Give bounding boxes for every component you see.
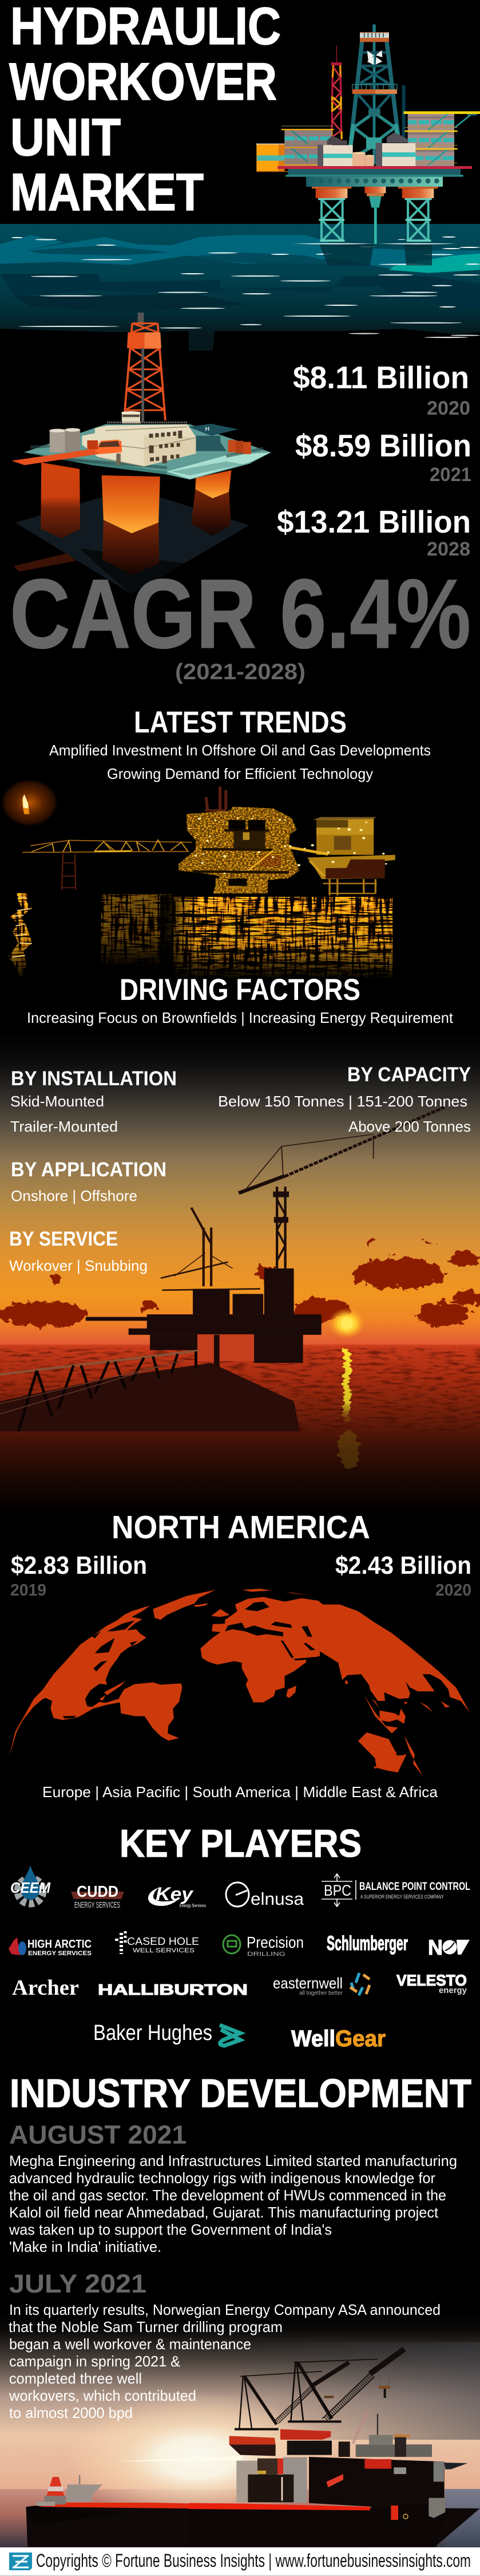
north america landmass bbox=[9, 1605, 150, 1756]
segment: by service: Workover | Snubbing bbox=[9, 1257, 148, 1274]
development: July 2021: began a well workover & maintenance bbox=[9, 2335, 251, 2353]
tanks and barrels bbox=[49, 428, 251, 454]
world globe map bbox=[9, 1589, 470, 1775]
logo: WellGear: Well bbox=[291, 2026, 335, 2051]
crane hook bbox=[324, 2386, 390, 2398]
australia bbox=[358, 1732, 406, 1773]
logo: CUDD: CUDD bbox=[77, 1882, 118, 1900]
development: July 2021: workovers, which contributed bbox=[9, 2387, 196, 2404]
logo: WellGear: Gear bbox=[335, 2026, 386, 2051]
helipad: H bbox=[205, 427, 209, 432]
photo: crane vessel at sunset bbox=[0, 2314, 480, 2547]
photo: offshore platform at night bbox=[0, 778, 395, 979]
sun flare bbox=[66, 2392, 329, 2524]
small crane bbox=[161, 1208, 260, 1290]
cuba and caribbean bbox=[100, 1681, 125, 1701]
background crane and superstructure bbox=[339, 2410, 432, 2457]
big crane bbox=[239, 1108, 444, 1269]
development: July 2021: to almost 2000 bpd bbox=[9, 2404, 133, 2421]
platform lights bbox=[188, 817, 387, 874]
title: WORKOVER bbox=[9, 53, 277, 111]
segment: by installation: Trailer-Mounted bbox=[10, 1118, 118, 1135]
title bbox=[9, 0, 281, 222]
segment: by installation: BY INSTALLATION bbox=[11, 1068, 177, 1090]
footer bbox=[0, 2547, 480, 2576]
driving factors: DRIVING FACTORS bbox=[120, 973, 360, 1007]
logo: Balance Point Control: A SUPERIOR ENERGY SERVICES COMPANY bbox=[360, 1894, 444, 1900]
development: August 2021: the oil and gas sector. The development of HWUs commenced in the bbox=[9, 2187, 446, 2204]
market value 2028 bbox=[277, 504, 471, 560]
title: MARKET bbox=[10, 163, 204, 222]
logo: Precision Drilling: Precision bbox=[247, 1933, 304, 1951]
logo: Cased Hole: CASED HOLE bbox=[127, 1936, 199, 1947]
crane vessel at right bbox=[189, 2349, 467, 2547]
logo: WellGear bbox=[291, 2026, 386, 2051]
development: July 2021: In its quarterly results, Norwegian Energy Company ASA announced bbox=[9, 2301, 441, 2318]
deck bbox=[24, 424, 271, 480]
flare bbox=[0, 778, 59, 827]
uk bbox=[211, 1609, 229, 1617]
market value 2028: $13.21 Billion bbox=[277, 504, 471, 539]
driving factors bbox=[27, 973, 454, 1026]
logo: easternwell: all together better bbox=[299, 1990, 343, 1996]
development: July 2021: that the Noble Sam Turner drilling program bbox=[9, 2318, 283, 2335]
crane houses bbox=[229, 2421, 342, 2456]
logo: High Arctic: HIGH ARCTIC bbox=[27, 1938, 92, 1951]
logo: NOV: N bbox=[428, 1936, 443, 1959]
logo: Halliburton: HALLIBURTON bbox=[98, 1981, 248, 1998]
south america bbox=[118, 1683, 182, 1740]
segment: by application: Onshore | Offshore bbox=[11, 1187, 137, 1204]
sun bbox=[328, 1308, 365, 1425]
clouds bbox=[0, 1241, 480, 1326]
walkway bridge bbox=[0, 1350, 300, 1431]
left block bbox=[256, 126, 334, 172]
derrick tower bbox=[351, 42, 399, 164]
logo: Cased Hole: WELL SERVICES bbox=[133, 1947, 195, 1954]
market value 2021: $8.59 Billion bbox=[295, 428, 471, 463]
development: August 2021: AUGUST 2021 bbox=[9, 2120, 187, 2149]
logo: CUDD bbox=[71, 1882, 124, 1910]
logo: Velesto Energy: VELESTO bbox=[396, 1972, 467, 1989]
other regions: Europe | Asia Pacific | South America | Middle East & Africa bbox=[42, 1783, 438, 1801]
logo: easternwell: easternwell bbox=[273, 1975, 343, 1992]
segment: by capacity: Below 150 Tonnes | 151-200 Tonnes bbox=[218, 1093, 467, 1110]
segment: by capacity bbox=[218, 1064, 471, 1135]
logo: Key bbox=[148, 1884, 206, 1908]
development: August 2021: was taken up to support the Government of India's bbox=[9, 2221, 332, 2238]
platform silhouette bbox=[86, 1269, 322, 1363]
sri lanka and east islands bbox=[345, 1680, 450, 1712]
logo: elnusa: elnusa bbox=[251, 1889, 304, 1909]
photo: sunset platform bbox=[0, 1031, 480, 1512]
main hull bbox=[189, 2457, 467, 2547]
latest trends: Growing Demand for Efficient Technology bbox=[107, 765, 373, 782]
development: July 2021 bbox=[9, 2269, 441, 2421]
CAGR: (2021-2028) bbox=[175, 660, 306, 684]
segment: by application bbox=[11, 1159, 166, 1204]
development: July 2021: completed three well bbox=[9, 2370, 142, 2387]
indonesia and philippines bbox=[364, 1695, 422, 1775]
orange crane arm bbox=[11, 440, 122, 465]
logo: High Arctic: ENERGY SERVICES bbox=[28, 1950, 92, 1957]
logo: CEEM bbox=[10, 1865, 51, 1904]
right side sky and sea tone bbox=[240, 2342, 480, 2547]
north america: 2019 bbox=[10, 1581, 46, 1600]
key players heading: KEY PLAYERS bbox=[120, 1822, 362, 1865]
logo: Baker Hughes: Baker Hughes bbox=[93, 2021, 212, 2045]
main platform bbox=[178, 786, 299, 893]
afro-eurasia bbox=[200, 1597, 470, 1712]
segment: by installation: Skid-Mounted bbox=[10, 1093, 104, 1110]
helipad bbox=[188, 424, 238, 451]
illustration: semi-submersible platform bbox=[11, 313, 271, 594]
illustration: sea bbox=[0, 224, 480, 350]
logo: Velesto Energy: energy bbox=[439, 1986, 467, 1995]
cream modules and tanks bbox=[318, 133, 415, 166]
latest trends: LATEST TRENDS bbox=[134, 706, 347, 739]
flare boom bbox=[22, 840, 192, 889]
segment: by capacity: BY CAPACITY bbox=[347, 1064, 471, 1086]
market value 2020: 2020 bbox=[427, 397, 470, 419]
logo: CEEM: CEEM bbox=[10, 1879, 51, 1896]
segment: by application: BY APPLICATION bbox=[11, 1159, 166, 1181]
segment: by service bbox=[9, 1228, 148, 1274]
logo: Cased Hole bbox=[117, 1931, 199, 1954]
deck and hull bbox=[256, 166, 472, 187]
segment: by installation bbox=[10, 1068, 177, 1135]
market value 2028: 2028 bbox=[427, 538, 470, 560]
north america: 2020 bbox=[435, 1581, 471, 1600]
north america: $2.43 Billion bbox=[335, 1551, 471, 1580]
logo: easternwell bbox=[273, 1973, 370, 1996]
segment: by capacity: Above 200 Tonnes bbox=[348, 1118, 471, 1135]
latest trends: Amplified Investment In Offshore Oil and Gas Developments bbox=[49, 742, 431, 759]
logo: Key: Energy Services bbox=[180, 1903, 206, 1908]
title: UNIT bbox=[10, 108, 121, 167]
development: July 2021: JULY 2021 bbox=[9, 2269, 146, 2298]
market value 2020: $8.11 Billion bbox=[293, 360, 469, 395]
icon: Fortune Business Insights logo bbox=[9, 2553, 32, 2570]
market value 2021: 2021 bbox=[430, 464, 471, 486]
logo: Balance Point Control bbox=[322, 1874, 470, 1907]
latest trends bbox=[49, 706, 431, 782]
logo: Precision Drilling: DRILLING bbox=[247, 1951, 285, 1957]
north america: $2.83 Billion bbox=[11, 1551, 147, 1580]
logo: High Arctic bbox=[9, 1937, 92, 1957]
logo: Key: Key bbox=[156, 1884, 194, 1904]
logo: Precision Drilling bbox=[223, 1933, 304, 1957]
water glint below sun bbox=[339, 1429, 359, 1468]
logo: elnusa bbox=[226, 1882, 304, 1909]
market value 2021 bbox=[295, 428, 471, 486]
tanker at left bbox=[26, 2475, 480, 2547]
north america bbox=[10, 1509, 471, 1600]
logo: NOV bbox=[428, 1936, 470, 1959]
accommodation building bbox=[82, 411, 196, 466]
development: July 2021: campaign in spring 2021 & bbox=[9, 2353, 180, 2370]
development: August 2021: advanced hydraulic technology rigs with indigenous knowledge for bbox=[9, 2169, 435, 2187]
greenland bbox=[153, 1589, 308, 1620]
illustration: offshore rig on the sea bbox=[256, 25, 480, 265]
waterline bbox=[293, 237, 456, 245]
right accommodation block bbox=[403, 111, 480, 166]
development: August 2021 bbox=[9, 2120, 457, 2255]
development: August 2021: 'Make in India' initiative. bbox=[9, 2238, 161, 2255]
development: August 2021: Kalol oil field near Ahmedabad, Gujarat. This manufacturing project bbox=[9, 2204, 439, 2221]
madagascar bbox=[286, 1685, 296, 1698]
north america: NORTH AMERICA bbox=[112, 1509, 370, 1546]
logo: CUDD: ENERGY SERVICES bbox=[74, 1900, 120, 1910]
inland seas bbox=[225, 1602, 416, 1755]
red crane tower bbox=[331, 46, 342, 139]
logo: Schlumberger: Schlumberger bbox=[327, 1932, 408, 1955]
crane frames and booms bbox=[239, 2349, 404, 2428]
segment: by service: BY SERVICE bbox=[9, 1228, 118, 1250]
driving factors: Increasing Focus on Brownfields | Increasing Energy Requirement bbox=[27, 1009, 454, 1026]
logo: Balance Point Control: BPC bbox=[324, 1882, 351, 1899]
water reflections bbox=[8, 892, 394, 979]
logo: Archer: Archer bbox=[12, 1976, 79, 2000]
accommodation module bbox=[289, 817, 395, 895]
development: August 2021: Megha Engineering and Infrastructures Limited started manufacturing bbox=[9, 2152, 457, 2169]
derrick bbox=[124, 313, 165, 422]
market value 2020 bbox=[293, 360, 470, 419]
support legs bbox=[312, 187, 438, 244]
